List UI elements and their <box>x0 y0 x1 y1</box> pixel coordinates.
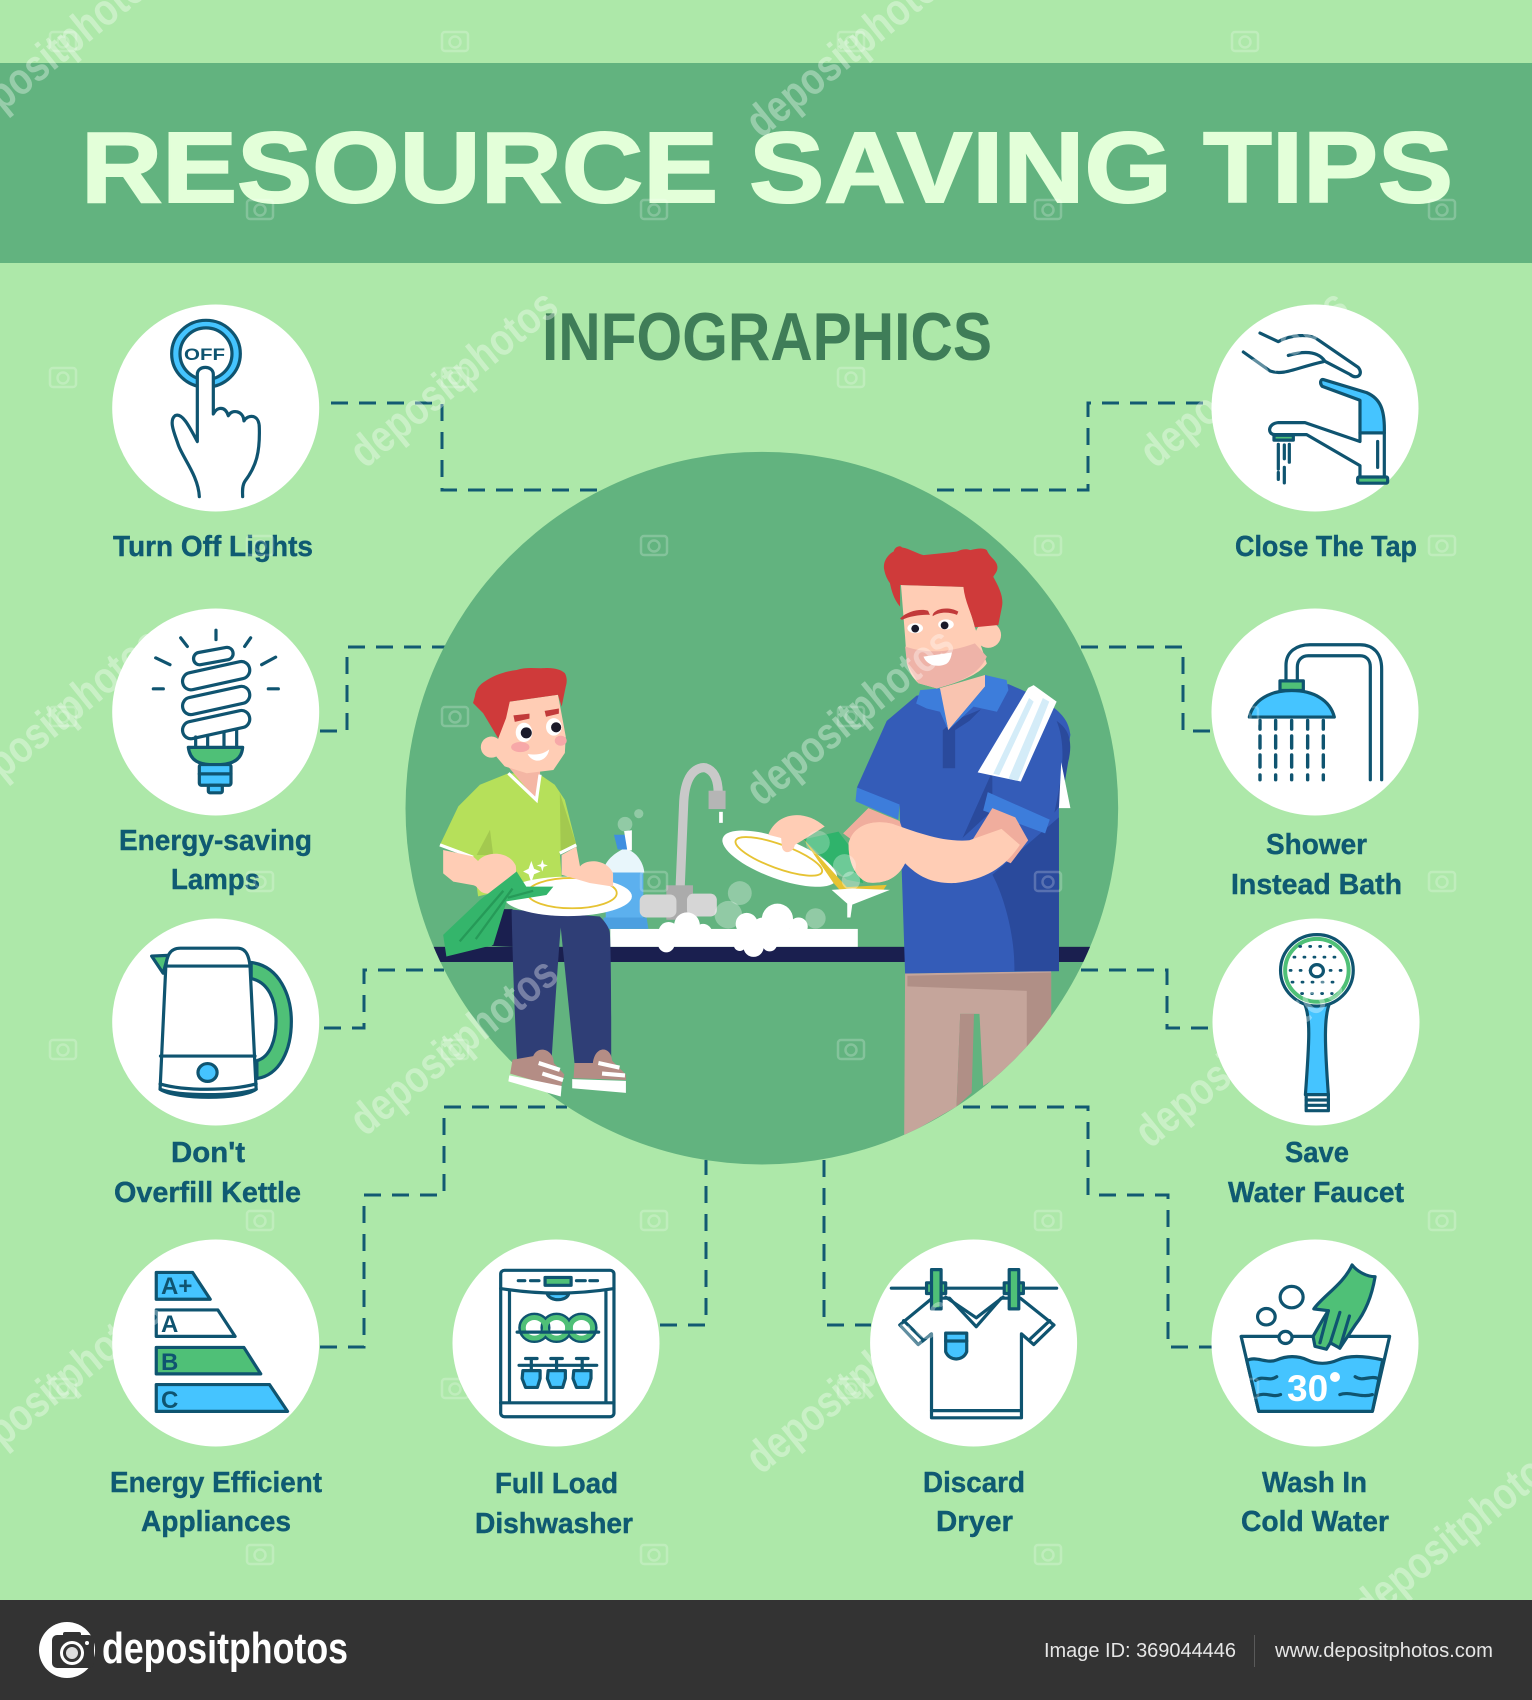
header banner <box>0 63 1532 263</box>
label: dishwasher: Full Load <box>495 1468 618 1500</box>
tip: save water faucet <box>1212 918 1420 1126</box>
hair <box>884 546 1002 627</box>
collar <box>916 675 1008 730</box>
face <box>901 585 987 688</box>
footer url: www.depositphotos.com <box>1274 1640 1493 1662</box>
label: energy efficient appliances <box>110 1467 322 1538</box>
label: discard dryer <box>923 1467 1025 1538</box>
eyes <box>907 623 923 633</box>
central circle illustration <box>400 452 1124 1164</box>
watermarks: depositphotos <box>735 1285 963 1483</box>
watermarks: depositphotos <box>339 279 567 477</box>
watermarks: depositphotos <box>735 617 963 815</box>
soap foam <box>658 881 826 957</box>
boy ear <box>481 737 502 758</box>
tip: energy-saving lamps <box>112 608 319 816</box>
forearm and fist <box>849 822 1020 883</box>
footer divider <box>1254 1635 1255 1667</box>
icon: off button <box>172 320 240 387</box>
ear <box>976 625 1002 648</box>
tip: kettle <box>112 918 319 1126</box>
label: discard dryer: Discard <box>923 1467 1025 1499</box>
watermarks: depositphotos <box>1124 959 1352 1157</box>
label: energy-saving lamps <box>119 825 312 896</box>
boy neck <box>508 767 540 800</box>
faucet <box>640 768 726 920</box>
subtitle: INFOGRAPHICS <box>542 299 992 375</box>
tip: shower instead bath <box>1212 608 1418 816</box>
label: dishwasher: Dishwasher <box>475 1508 633 1540</box>
footer logo <box>39 1622 348 1678</box>
boy shoes <box>510 1050 564 1088</box>
label: kettle: Overfill Kettle <box>114 1177 301 1209</box>
sink <box>610 929 858 947</box>
shirt cuffs <box>856 787 1050 833</box>
boy shirt <box>440 773 576 896</box>
tip: energy efficient appliances: A <box>161 1311 178 1338</box>
boy <box>440 668 632 1097</box>
man <box>716 546 1070 1136</box>
tip: discard dryer <box>870 1240 1077 1446</box>
boy plate <box>503 877 632 916</box>
tip: turn off lights: OFF <box>184 345 225 364</box>
label: energy-saving lamps: Energy-saving <box>119 825 312 857</box>
watermarks: depositphotos <box>1129 279 1357 477</box>
tip: turn off lights <box>112 304 319 512</box>
dashed connectors <box>320 403 1213 1347</box>
watermarks: depositphotos <box>339 947 567 1145</box>
footer bar <box>0 1600 1532 1700</box>
label: kettle <box>114 1137 301 1209</box>
tip: wash in cold water: 30 <box>1287 1368 1328 1409</box>
shaded upper arm <box>843 808 905 840</box>
boy hair <box>473 668 567 738</box>
boy face <box>496 695 566 773</box>
shirt <box>857 684 1070 973</box>
label: wash in cold water <box>1241 1467 1389 1538</box>
tip: energy efficient appliances: A+ <box>161 1273 192 1300</box>
label: wash in cold water: Wash In <box>1262 1467 1367 1499</box>
label: discard dryer: Dryer <box>936 1506 1013 1538</box>
label: shower instead bath <box>1231 829 1402 901</box>
label: close the tap: Close The Tap <box>1235 531 1417 563</box>
label: save water faucet: Save <box>1285 1137 1349 1169</box>
brows <box>900 609 958 620</box>
title: RESOURCE SAVING TIPS <box>81 112 1453 224</box>
tip: energy efficient appliances: C <box>161 1387 178 1414</box>
counter top <box>400 947 1124 962</box>
plate held by man <box>722 830 838 887</box>
label: energy-saving lamps: Lamps <box>171 864 260 896</box>
tip: dishwasher <box>452 1240 660 1446</box>
label: wash in cold water: Cold Water <box>1241 1506 1389 1538</box>
label: energy efficient appliances: Energy Efficient <box>110 1467 322 1499</box>
tip: energy efficient appliances: B <box>161 1349 178 1376</box>
sponge <box>804 840 887 890</box>
tip: energy efficient appliances <box>112 1240 319 1446</box>
label: dishwasher <box>475 1468 633 1540</box>
boy arms and hands <box>443 850 516 894</box>
towel <box>1059 762 1070 808</box>
drying cloth <box>443 872 553 956</box>
soap bottle <box>603 809 648 929</box>
boy trousers <box>480 909 512 947</box>
label: energy efficient appliances: Appliances <box>141 1506 291 1538</box>
tip: close the tap <box>1212 304 1418 512</box>
label: kettle: Don't <box>171 1137 246 1169</box>
label: turn off lights: Turn Off Lights <box>113 531 313 563</box>
sparkle <box>523 860 548 883</box>
trousers <box>904 971 1051 1136</box>
neck <box>939 675 985 730</box>
label: shower instead bath: Shower <box>1266 829 1367 861</box>
label: save water faucet: Water Faucet <box>1228 1177 1404 1209</box>
tip: wash in cold water <box>1212 1240 1418 1446</box>
label: save water faucet <box>1228 1137 1404 1209</box>
footer logo: depositphotos <box>102 1624 348 1673</box>
footer image id: Image ID: 369044446 <box>1044 1640 1236 1662</box>
label: shower instead bath: Instead Bath <box>1231 869 1402 901</box>
man's hand <box>768 815 825 852</box>
